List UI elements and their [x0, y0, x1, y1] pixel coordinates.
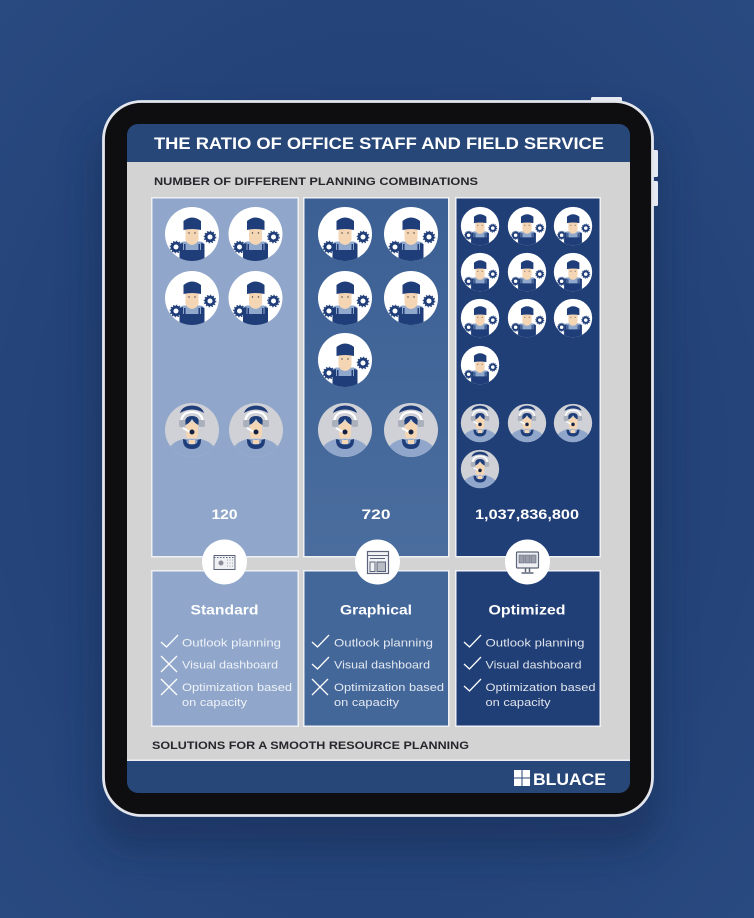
subheading: combinations: NUMBER OF DIFFERENT PLANNING COMBINATIONS — [154, 176, 478, 188]
panel: graphical combinations — [304, 198, 449, 557]
feature list optimized: on capacity — [486, 697, 551, 709]
connector band — [127, 557, 630, 570]
feature list optimized: Optimization based — [486, 682, 596, 694]
operator icons standard — [165, 403, 283, 460]
panel: standard — [152, 571, 298, 726]
panel: optimized — [456, 571, 600, 726]
feature list graphical: Optimization based — [334, 682, 444, 694]
feature list optimized — [464, 635, 596, 709]
feature list graphical: Outlook planning — [334, 638, 433, 650]
title: THE RATIO OF OFFICE STAFF AND FIELD SERVICE — [154, 134, 604, 153]
feature list standard: Outlook planning — [182, 638, 281, 650]
panel: graphical — [304, 571, 449, 726]
logo: BLUACE — [533, 771, 606, 789]
heading optimized: Optimized — [488, 602, 566, 618]
feature list graphical: on capacity — [334, 697, 400, 709]
value 120: 120 — [212, 506, 238, 522]
feature list standard: Optimization based — [182, 682, 292, 694]
icon: dashboard window — [355, 540, 400, 584]
value 720: 720 — [362, 506, 391, 522]
feature list standard: on capacity — [182, 697, 248, 709]
feature list graphical: Visual dashboard — [334, 660, 430, 672]
operator icons graphical — [318, 403, 438, 460]
heading graphical: Graphical — [340, 602, 412, 618]
panel: optimized combinations — [456, 198, 600, 557]
operator icons optimized — [461, 404, 592, 490]
worker icons optimized — [461, 207, 592, 386]
worker icons standard — [165, 207, 282, 328]
feature list optimized: Outlook planning — [486, 638, 584, 650]
icon: calendar — [202, 540, 247, 584]
subheading: solutions: SOLUTIONS FOR A SMOOTH RESOURCE PLANNING — [152, 740, 469, 752]
icon: monitor — [505, 540, 550, 584]
screen — [127, 124, 630, 793]
feature list graphical — [312, 635, 444, 709]
feature list optimized: Visual dashboard — [486, 660, 582, 672]
heading standard: Standard — [190, 602, 258, 618]
feature list standard: Visual dashboard — [182, 660, 278, 672]
panel: standard combinations — [152, 198, 298, 557]
value 1,037,836,800: 1,037,836,800 — [475, 506, 579, 522]
worker icons graphical — [318, 207, 438, 390]
feature list standard — [161, 635, 292, 709]
tablet device — [104, 97, 658, 816]
